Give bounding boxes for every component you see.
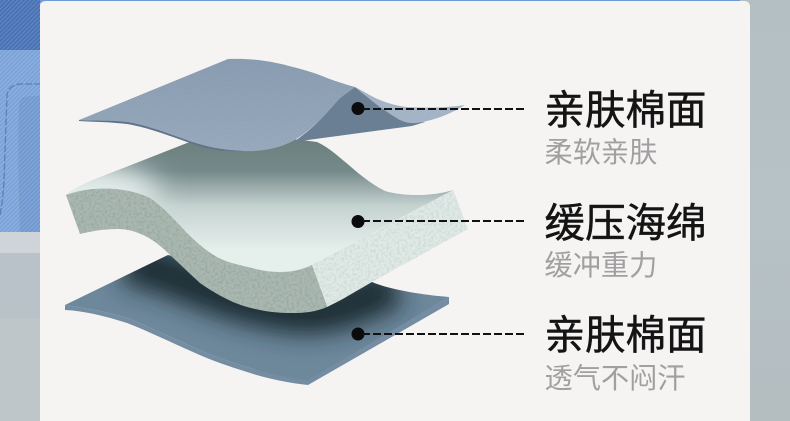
callout: bottom layer marker	[352, 328, 524, 340]
callout: foam layer marker	[352, 215, 524, 228]
label: top layer: 亲肤棉面	[544, 87, 706, 133]
layer: top skin-friendly fabric sheet	[79, 59, 465, 151]
background: blue fabric sofa on the left	[0, 0, 40, 421]
callout: top layer marker	[352, 102, 524, 115]
sheet curled flap	[355, 87, 465, 123]
label: top layer: 柔软亲肤	[544, 136, 657, 168]
sheet upper surface	[79, 59, 355, 151]
background: top blue strip	[40, 0, 740, 3]
background: right grey sofa	[740, 0, 790, 421]
layer: compression foam	[66, 140, 468, 313]
label: foam layer: 缓压海绵	[544, 200, 706, 246]
foam right side face	[312, 190, 468, 307]
label: foam layer	[544, 200, 706, 281]
layer: bottom skin-friendly fabric sheet	[60, 250, 455, 385]
label: foam layer: 缓冲重力	[544, 249, 657, 281]
label: top layer	[544, 87, 706, 168]
sheet underside fold	[293, 87, 425, 142]
foam front face	[66, 189, 327, 313]
label: bottom layer	[544, 312, 706, 394]
label: bottom layer: 亲肤棉面	[544, 312, 706, 358]
foam top surface	[66, 140, 452, 272]
label: bottom layer: 透气不闷汗	[544, 362, 685, 394]
